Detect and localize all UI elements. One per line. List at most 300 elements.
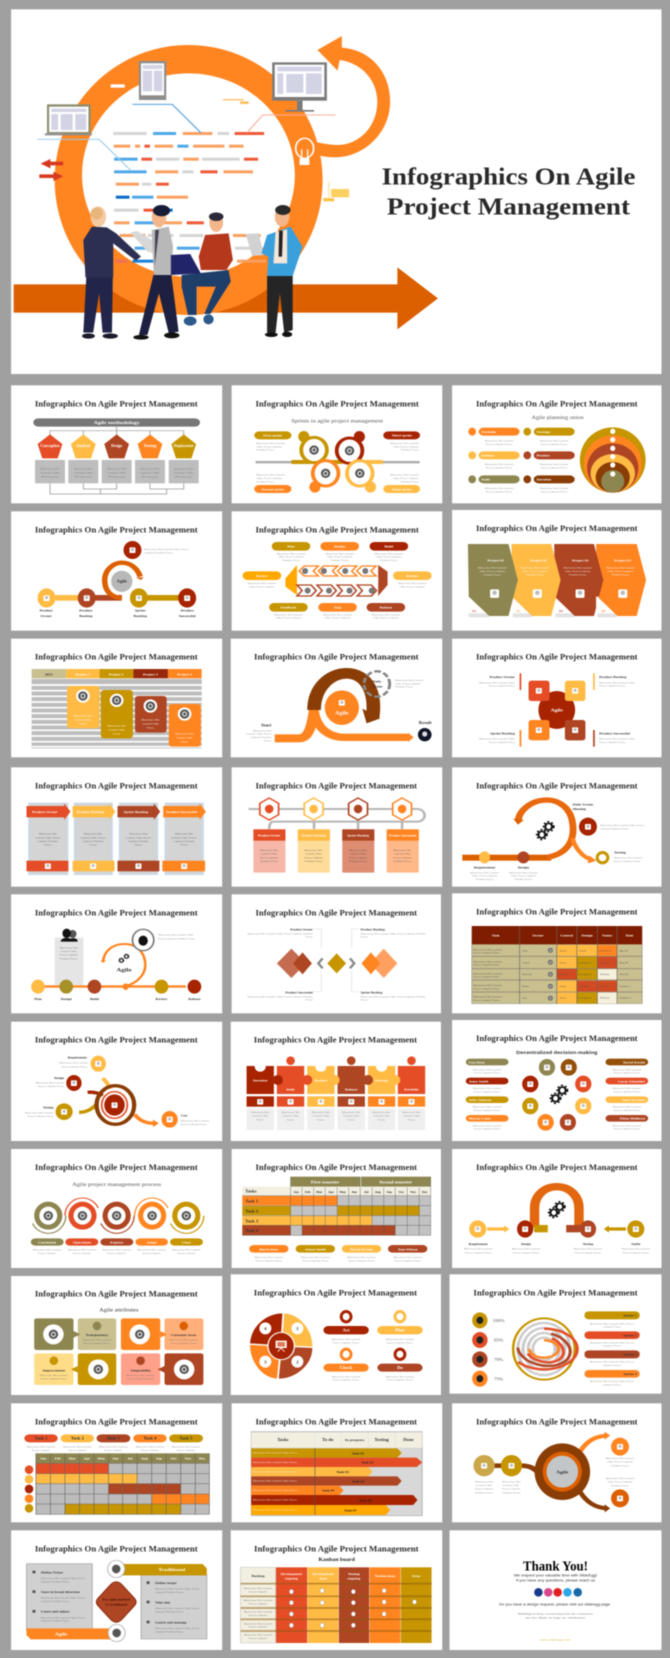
stage pills: Release bbox=[380, 606, 393, 610]
table text: In progress bbox=[578, 997, 592, 1000]
sprint bars: Sprint 2 bbox=[623, 1334, 637, 1337]
scrum nodes: Fusce Lobortis Purus bbox=[614, 860, 641, 863]
table text: Jen bbox=[522, 997, 527, 1000]
slide: semester gantt bbox=[232, 1149, 441, 1268]
arch nodes: Design bbox=[521, 1242, 531, 1246]
cycle steps bbox=[323, 1310, 423, 1382]
name pills: Maecenas Nisi Laoreet bbox=[613, 1087, 641, 1090]
sprint bars: Lobortis Purus bbox=[603, 1326, 622, 1329]
gantt table: Task 1 bbox=[245, 1199, 258, 1203]
icon bars bbox=[26, 861, 205, 871]
table grid: Project 2 bbox=[109, 673, 124, 676]
agile circle: Agile bbox=[335, 711, 349, 716]
table grid: Project 4 bbox=[177, 673, 192, 676]
table text: October 5 bbox=[619, 997, 632, 1000]
task arrows: Maecenas Nisi Laoreet Odio, Fusce bbox=[253, 1509, 298, 1511]
puzzle notes: Laoreet Odio bbox=[313, 1115, 330, 1118]
onion labels bbox=[468, 428, 575, 493]
sprint bars: Sprint 3 bbox=[623, 1353, 637, 1357]
shield text: Odio, Fusce Lobortis bbox=[565, 570, 591, 573]
slide: PDCA cycle bbox=[231, 1274, 441, 1395]
timeline cards: Laoreet Odio, bbox=[261, 853, 278, 856]
table text: Owner bbox=[532, 934, 544, 937]
table text: Maecenas Nisi Laoreet bbox=[473, 961, 502, 963]
slide: project timeline table: Infographics On Agile Project Management bbox=[35, 653, 198, 662]
task pills: Fusce Lobortis bbox=[177, 1449, 196, 1452]
process pills: Close bbox=[182, 1241, 191, 1244]
puzzle notes: Purus bbox=[317, 1119, 325, 1121]
shield text: Project 03 bbox=[572, 559, 589, 562]
concentric progress chart bbox=[511, 1318, 577, 1380]
stage notes: Odio, Fusce Lobortis bbox=[376, 556, 402, 559]
attribute blocks: Maecenas Nisi Laoreet bbox=[83, 1339, 112, 1342]
puzzle icon strip bbox=[247, 1096, 425, 1107]
shield text: Porttitor Purus bbox=[612, 574, 630, 576]
slide: daily scrum loop: Infographics On Agile Project Management bbox=[476, 781, 638, 791]
puzzle notes: Laoreet Odio bbox=[403, 1115, 420, 1118]
puzzle pieces bbox=[247, 1056, 425, 1094]
gantt table bbox=[242, 1177, 431, 1235]
sprint notes: Porttitor Purus bbox=[401, 449, 420, 452]
owner pills: Maecenas Nisi Laoreet bbox=[347, 1256, 376, 1259]
kanban columns: ongoing bbox=[347, 1577, 361, 1581]
puzzle notes: Maecenas Nisi bbox=[281, 1111, 300, 1114]
icon: lightbulb bbox=[296, 138, 314, 165]
path labels bbox=[40, 609, 196, 618]
start note: Lobortis Porttitor bbox=[251, 736, 272, 739]
stage pills: Feedback bbox=[281, 606, 296, 610]
project cards: Maecenas Nisi bbox=[74, 715, 92, 718]
month chart: Feb bbox=[55, 1457, 61, 1461]
attribute blocks: Customer focus bbox=[171, 1333, 197, 1337]
slide: project shields: Infographics On Agile Project Management bbox=[476, 524, 638, 534]
grey text boxes: Purus bbox=[41, 476, 61, 478]
traditional panel: Take aim bbox=[155, 1601, 170, 1604]
quadrant core: Agile bbox=[551, 709, 564, 713]
slide rows 3 and 4 bbox=[11, 639, 661, 887]
slide: sprints in agile project management: Sprints in agile project management bbox=[291, 419, 384, 424]
task pills: Task 2 bbox=[71, 1436, 84, 1441]
slide: PDCA cycle: Infographics On Agile Project Management bbox=[254, 1288, 418, 1298]
process pills: Explore bbox=[110, 1241, 124, 1244]
stage notes: Porttitor Purus bbox=[380, 559, 399, 562]
kanban columns: Maecenas Nisi Laoreet bbox=[244, 1634, 273, 1637]
traditional panel: Lunch and manage bbox=[155, 1621, 187, 1624]
stage notes: Maecenas Nisi Laoreet bbox=[372, 614, 400, 616]
slide: agile attributes: Infographics On Agile Project Management bbox=[35, 1290, 198, 1299]
table text bbox=[473, 934, 634, 1002]
owner pills: Maecenas Nisi Laoreet bbox=[393, 1256, 422, 1259]
task arrows: Maecenas Nisi Laoreet Odio, Fusce bbox=[253, 1471, 298, 1473]
table text: Calvin bbox=[522, 962, 531, 964]
shield text: Odio, Fusce Lobortis bbox=[608, 570, 634, 573]
stage pills: Review bbox=[256, 574, 268, 578]
agile panel: Lobortis Porttitor Purus bbox=[41, 1620, 70, 1623]
shield text: Maecenas Nisi Laoreet bbox=[521, 567, 549, 570]
slide: task gantt bbox=[11, 1403, 222, 1522]
sprint notes: Porttitor Purus bbox=[256, 449, 275, 452]
slide: kanban board: Infographics On Agile Project Management bbox=[254, 1544, 419, 1554]
kanban columns: Fusce Lobortis bbox=[249, 1603, 268, 1605]
shield text: 03 bbox=[559, 609, 563, 613]
slide: task status arrows bbox=[232, 1403, 442, 1522]
process pills: Maecenas Nisi Laoreet bbox=[68, 1249, 97, 1252]
timeline cards: Laoreet Odio, bbox=[394, 853, 411, 856]
column text: Maecenas Nisi bbox=[84, 833, 103, 836]
agile arc and timeline bbox=[31, 944, 201, 1001]
slide: agile product path: Infographics On Agile Project Management bbox=[35, 525, 198, 535]
arrow headers: Product Successful bbox=[166, 810, 197, 814]
timeline cards: Maecenas Nisi bbox=[349, 849, 368, 852]
agile panel bbox=[26, 1564, 125, 1642]
diamond notes: Purus bbox=[306, 936, 314, 939]
table text: Maecenas Nisi Laoreet bbox=[473, 949, 502, 951]
puzzle pieces: Portfolio bbox=[404, 1088, 419, 1091]
loop return arrow bbox=[314, 36, 390, 157]
hub nodes bbox=[473, 1438, 635, 1507]
kanban markers bbox=[289, 1588, 417, 1628]
shield text: Project 04 bbox=[614, 559, 631, 562]
hub nodes: Maecenas Nisi bbox=[475, 1481, 494, 1483]
team note box bbox=[55, 929, 83, 985]
puzzle notes bbox=[247, 1108, 425, 1130]
name pills: David Davids bbox=[623, 1061, 646, 1064]
progress badges: 75% bbox=[494, 1377, 504, 1381]
cycle steps: Maecenas Nisi Laoreet bbox=[332, 1338, 361, 1341]
process pills: Fusce Lobortis bbox=[38, 1252, 57, 1255]
sprint bars: Maecenas Nisi Laoreet Odio, Fusce bbox=[590, 1342, 635, 1344]
name pills: Lisa Rose bbox=[469, 1061, 485, 1064]
stage notes: Porttitor Purus bbox=[282, 559, 301, 562]
month chart: Oct bbox=[170, 1457, 177, 1461]
traditional panel: Lobortis Porttitor Purus bbox=[155, 1631, 184, 1633]
table text: October 1 bbox=[619, 985, 632, 988]
timeline cards: Maecenas Nisi bbox=[393, 849, 412, 852]
radial nodes: Fusce Lobortis Purus bbox=[61, 1066, 88, 1068]
column text: Laoreet Odio, Fusce bbox=[172, 837, 197, 839]
progress badges bbox=[472, 1312, 505, 1387]
pentagon stages: Testing bbox=[144, 444, 157, 448]
name pills: Maecenas Nisi Laoreet bbox=[473, 1106, 502, 1109]
start note: Purus bbox=[264, 740, 272, 742]
table grid: 2023 bbox=[45, 673, 53, 676]
timeline cards: Porttitor Purus bbox=[394, 860, 412, 863]
shield text: Maecenas Nisi Laoreet bbox=[478, 567, 507, 570]
stage pills: Stop bbox=[334, 606, 341, 610]
stage notes: Odio, Fusce Lobortis bbox=[325, 617, 351, 620]
arch nodes: Stable bbox=[631, 1242, 641, 1246]
arch nodes: Fusce Lobortis Purus bbox=[575, 1252, 602, 1254]
name pills: Maecenas Nisi Laoreet bbox=[613, 1106, 641, 1109]
slide: decentralized decision-making bbox=[452, 1020, 661, 1141]
cycle steps: Do bbox=[397, 1366, 403, 1370]
backlog task dashes bbox=[113, 132, 266, 263]
cycle steps: Check bbox=[340, 1366, 353, 1370]
versus diamond: vs traditional bbox=[105, 1603, 127, 1607]
puzzle notes: Laoreet Odio bbox=[374, 1115, 390, 1118]
sprint notes: Odio, Fusce Lobortis bbox=[256, 477, 283, 480]
scrum nodes: Testing bbox=[614, 851, 626, 855]
column text: Purus bbox=[44, 844, 52, 847]
methodology bar bbox=[33, 418, 200, 427]
path labels: Product bbox=[40, 609, 54, 613]
gantt table: Sep bbox=[387, 1190, 392, 1194]
agile panel: Learn and adjust bbox=[41, 1610, 70, 1614]
stage notes: Odio, Fusce Lobortis bbox=[327, 556, 353, 559]
quadrant notes: Maecenas Nisi Laoreet Odio, bbox=[599, 738, 635, 741]
shield text: Porttitor Purus bbox=[483, 574, 502, 576]
hub nodes: Porttitor Purus bbox=[475, 1492, 494, 1494]
slide: agile chevron cycle bbox=[232, 511, 442, 631]
hexagon icons bbox=[260, 798, 411, 820]
radial nodes: Fusce Lobortis Purus bbox=[38, 1085, 65, 1088]
gantt table: Task 2 bbox=[245, 1209, 258, 1213]
month chart: Dec bbox=[199, 1457, 206, 1461]
arch nodes: Maecenas Nisi Laoreet bbox=[574, 1248, 602, 1251]
pentagon stages: Analysis bbox=[76, 444, 91, 448]
stage notes: Maecenas Nisi Laoreet bbox=[375, 553, 403, 555]
sprint bars: Maecenas Nisi Laoreet Odio, Fusce bbox=[590, 1361, 635, 1364]
timeline cards: Fusce Lobortis bbox=[393, 857, 412, 859]
table text: On hold bbox=[600, 985, 610, 988]
attribute blocks: Fusce Lobortis Purus bbox=[127, 1378, 155, 1380]
project cards: Laoreet Odio bbox=[177, 737, 193, 740]
attribute blocks: Fusce Lobortis Purus bbox=[41, 1378, 68, 1380]
path bars and nodes bbox=[38, 541, 196, 608]
kanban columns: done bbox=[319, 1577, 328, 1581]
grey text boxes: Maecenas Nisi bbox=[41, 468, 60, 470]
agile arc and timeline: Release bbox=[188, 997, 201, 1001]
grey text boxes: Purus bbox=[75, 476, 94, 478]
slide: agile timeline: Infographics On Agile Project Management bbox=[35, 909, 198, 918]
attribute blocks: Transparency bbox=[86, 1333, 109, 1337]
website link: www.slideegg.com bbox=[540, 1639, 570, 1641]
slide: process rings: Agile project management process bbox=[72, 1183, 162, 1188]
stage notes bbox=[248, 553, 427, 620]
column text: Laoreet Odio, Fusce bbox=[81, 837, 106, 839]
column text: Maecenas Nisi bbox=[39, 833, 57, 836]
sprint pills: Second sprint bbox=[261, 488, 285, 491]
agile panel: Maecenas Nisi Laoreet Odio, Fusce bbox=[41, 1577, 86, 1580]
radial nodes: Requirement bbox=[68, 1056, 87, 1059]
task pills: Task 1 bbox=[35, 1436, 48, 1441]
timeline cards: Maecenas Nisi bbox=[305, 849, 323, 852]
icon: laptop bbox=[45, 104, 92, 135]
kanban columns: Done bbox=[412, 1574, 421, 1578]
design request note bbox=[499, 1603, 610, 1619]
shield text: Odio, Fusce Lobortis bbox=[522, 570, 549, 573]
onion layers bbox=[580, 427, 646, 493]
table text: Done bbox=[579, 950, 587, 952]
slide: agile quadrant: Infographics On Agile Project Management bbox=[476, 653, 638, 662]
scrum nodes: Porttitor Purus bbox=[515, 878, 533, 881]
scrum nodes: Maecenas Nisi Laoreet bbox=[470, 872, 499, 874]
table text: Fusce Lobortis Purus bbox=[473, 952, 500, 955]
timeline cards: Porttitor Purus bbox=[349, 860, 368, 863]
table text: Maecenas Nisi Laoreet bbox=[473, 996, 502, 999]
pentagon stages bbox=[38, 434, 196, 458]
scrum nodes bbox=[470, 803, 645, 881]
slide: diamond comparison bbox=[232, 894, 441, 1013]
cycle steps: Fusce Lobortis Purus bbox=[333, 1342, 360, 1344]
table text: Maria bbox=[522, 985, 530, 988]
daily scrum ring: Porttitor Purus bbox=[395, 686, 414, 689]
timeline cards: Product Owner bbox=[258, 834, 281, 837]
project cards: Laoreet Odio bbox=[75, 719, 92, 722]
timeline cards: Fusce Lobortis bbox=[260, 857, 279, 859]
column text: Maecenas Nisi bbox=[129, 833, 148, 836]
central spiral bbox=[79, 1078, 159, 1127]
timeline cards: Laoreet Odio, bbox=[305, 853, 322, 856]
puzzle notes: Laoreet Odio bbox=[252, 1115, 269, 1118]
quadrant notes: Maecenas Nisi Laoreet Odio, bbox=[479, 738, 515, 741]
thank you message: We respect your valuable time with SlideEgg! bbox=[514, 1574, 597, 1577]
stage notes: Maecenas Nisi Laoreet bbox=[248, 582, 276, 585]
name pills: Fusce Lobortis Purus bbox=[474, 1072, 501, 1075]
timeline cards: Fusce Lobortis bbox=[349, 857, 368, 859]
slide: agile timeline bbox=[11, 894, 222, 1013]
process pills: Fusce Lobortis bbox=[73, 1252, 92, 1255]
slide: agile product path bbox=[11, 511, 222, 631]
stage pills bbox=[243, 542, 432, 612]
diamond notes: Product Owner bbox=[290, 928, 314, 931]
traditional panel: Maecenas Nisi Laoreet Odio, Fusce bbox=[155, 1588, 200, 1591]
puzzle pieces: Product bbox=[314, 1079, 328, 1083]
daily scrum ring: Maecenas Nisi Laoreet bbox=[395, 679, 424, 682]
timeline cards: Sprint Backlog bbox=[347, 834, 370, 837]
task pills: Maecenas Nisi Laoreet bbox=[172, 1446, 200, 1449]
puzzle notes: Maecenas Nisi bbox=[251, 1111, 270, 1114]
timeline cards bbox=[253, 829, 419, 873]
design request note: SlideEgg hosting, researching from the companies bbox=[518, 1613, 594, 1615]
diamond notes: Maecenas Nisi Laoreet Odio, Fusce Lobortis Porttitor bbox=[248, 933, 313, 935]
kanban columns: Maecenas Nisi Laoreet bbox=[244, 1599, 273, 1602]
column text: Maecenas Nisi bbox=[175, 833, 194, 836]
name pills: Maecenas Nisi Laoreet bbox=[613, 1125, 641, 1127]
progress badges: 100% bbox=[493, 1319, 505, 1323]
attribute blocks: Improvement bbox=[43, 1369, 66, 1372]
status board bbox=[251, 1432, 422, 1516]
arrow headers: Product Backlog bbox=[77, 810, 105, 814]
small chart marks bbox=[323, 182, 349, 201]
slide: sprint progress rings bbox=[450, 1274, 661, 1394]
owner pills: Fusce Lobortis Purus bbox=[348, 1260, 375, 1262]
name pills: Maecenas Nisi Laoreet bbox=[613, 1069, 641, 1071]
owner pills: Fusce Lobortis Purus bbox=[302, 1260, 329, 1262]
hub nodes: Maecenas Nisi Laoreet bbox=[606, 1457, 635, 1460]
task arrows: Task 07 bbox=[344, 1509, 357, 1512]
puzzle notes: Maecenas Nisi bbox=[372, 1111, 391, 1114]
sprint notes: Porttitor Purus bbox=[256, 481, 275, 483]
radial nodes: Cost bbox=[181, 1114, 187, 1118]
slide: agile versus traditional bbox=[11, 1530, 222, 1650]
gantt table: First semester bbox=[311, 1180, 339, 1184]
radial nodes: Maecenas Nisi Laoreet bbox=[181, 1120, 209, 1123]
puzzle notes: Purus bbox=[348, 1119, 356, 1121]
process pills: Fusce Lobortis bbox=[177, 1252, 196, 1255]
table text: Fusce Lobortis Purus bbox=[473, 976, 500, 979]
traditional panel bbox=[108, 1560, 207, 1639]
puzzle pieces: Strategy bbox=[375, 1079, 389, 1083]
task arrows: Task 05 bbox=[322, 1489, 335, 1493]
shield text bbox=[472, 559, 635, 613]
kanban columns: Testing bbox=[348, 1572, 360, 1576]
process pills bbox=[31, 1238, 203, 1255]
sprint bars: Maecenas Nisi Laoreet Odio, Fusce bbox=[590, 1323, 635, 1325]
name pills: Fusce Lobortis Purus bbox=[474, 1109, 501, 1112]
puzzle notes: Purus bbox=[287, 1119, 295, 1121]
start note: Maecenas Nisi bbox=[253, 730, 272, 732]
traditional panel: Lobortis Porttitor Purus bbox=[155, 1591, 184, 1594]
arch nodes: Maecenas Nisi Laoreet bbox=[622, 1248, 650, 1251]
table text: On hold bbox=[600, 962, 610, 964]
hub nodes: Maecenas Nisi Laoreet bbox=[606, 1477, 635, 1480]
diamond notes bbox=[248, 928, 426, 1002]
task arrows: Task 06 bbox=[359, 1499, 372, 1502]
quadrant notes: Fusce Lobortis Purus bbox=[599, 685, 626, 688]
slide: sprint progress rings: Infographics On Agile Project Management bbox=[473, 1288, 638, 1298]
owner pills: Maecenas Nisi Laoreet bbox=[301, 1256, 330, 1259]
timeline cards: Porttitor Purus bbox=[260, 860, 279, 863]
arch nodes: Fusce Lobortis Purus bbox=[623, 1252, 650, 1254]
table text: Done bbox=[560, 962, 567, 964]
shield text: Maecenas Nisi Laoreet bbox=[606, 567, 635, 570]
month chart: Mar bbox=[69, 1457, 76, 1461]
stage notes: Odio, Fusce Lobortis bbox=[276, 617, 302, 620]
table text: On hold bbox=[579, 985, 589, 988]
puzzle pieces: Release bbox=[345, 1088, 358, 1091]
agile panel: Define Vision bbox=[41, 1571, 63, 1574]
table text: John bbox=[522, 950, 529, 952]
project cards: Laoreet Odio bbox=[109, 729, 125, 732]
slide: process rings: Infographics On Agile Project Management bbox=[35, 1163, 198, 1173]
daily scrum ring: Daily bbox=[373, 680, 382, 684]
task pills: Task 3 bbox=[107, 1436, 120, 1441]
owner pills: Anton Smith bbox=[305, 1248, 326, 1251]
stage notes: Maecenas Nisi Laoreet bbox=[323, 614, 352, 616]
table text: On hold bbox=[558, 973, 568, 976]
slide: decentralized decision-making: Decentralized decision-making bbox=[516, 1051, 597, 1056]
quadrant notes: Product Successful bbox=[599, 732, 630, 735]
kanban columns: Fusce Lobortis bbox=[249, 1591, 268, 1593]
sprint notes bbox=[256, 442, 420, 483]
quadrant notes: Product Owner bbox=[490, 675, 515, 679]
project cards: Purus bbox=[181, 741, 189, 744]
stage pills: Design bbox=[334, 545, 345, 549]
grey text boxes: Purus bbox=[141, 476, 160, 478]
column text: Lobortis Porttitor bbox=[38, 840, 58, 843]
stage notes: Maecenas Nisi Laoreet bbox=[277, 553, 305, 555]
task pills: Fusce Lobortis bbox=[104, 1449, 123, 1452]
shield text: 04 bbox=[601, 609, 606, 613]
slide: agile planning onion bbox=[452, 385, 661, 503]
table text: Done bbox=[560, 950, 567, 952]
kanban columns: Maecenas Nisi Laoreet bbox=[244, 1611, 273, 1614]
traditional panel: Traditional bbox=[158, 1568, 186, 1573]
slide: agile methodology: Infographics On Agile Project Management bbox=[35, 399, 198, 409]
puzzle notes: Laoreet Odio bbox=[283, 1115, 299, 1118]
quadrant core bbox=[529, 681, 585, 740]
arrow headers bbox=[26, 803, 206, 820]
chevron band bbox=[285, 565, 388, 596]
scrum nodes: Odio, Fusce Lobortis bbox=[472, 875, 498, 878]
gantt table: Aug bbox=[375, 1190, 381, 1194]
hub rings bbox=[535, 1443, 590, 1500]
diamond notes: Product Backlog bbox=[361, 928, 385, 931]
project cards: Purus bbox=[79, 723, 87, 726]
diamond notes: Purus bbox=[361, 999, 369, 1002]
slide: hexagon timeline bbox=[232, 767, 442, 887]
